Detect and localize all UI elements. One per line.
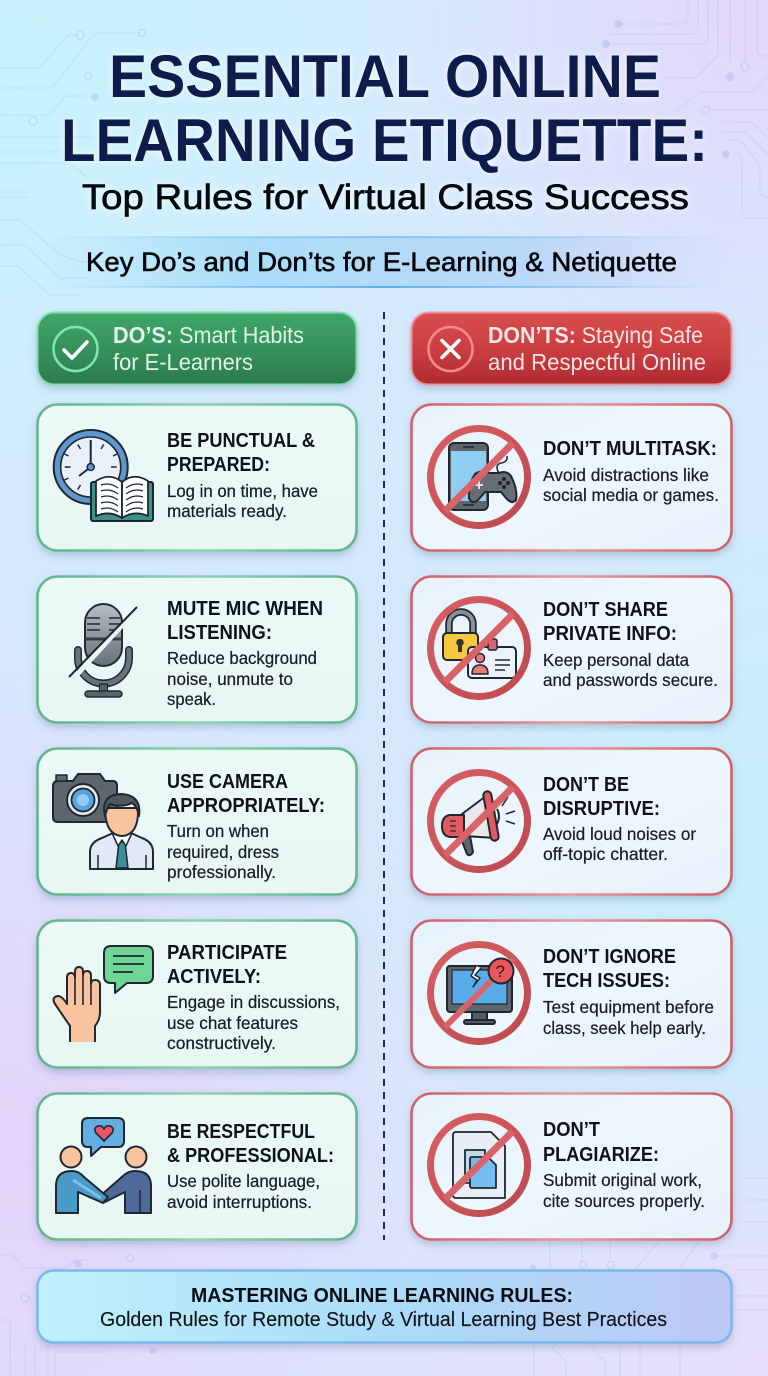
subtitle: Top Rules for Virtual Class Success <box>82 178 689 217</box>
text: MUTE MIC WHEN <box>167 598 323 620</box>
icon: check circle <box>54 327 98 371</box>
panel: don't plagiarize <box>412 1094 732 1240</box>
text: materials ready. <box>167 501 287 521</box>
text: Reduce background <box>167 648 317 668</box>
text: USE CAMERA <box>167 771 288 793</box>
text: required, dress <box>167 842 279 862</box>
icon: handshake with heart bubble <box>56 1118 151 1213</box>
text: professionally. <box>167 862 276 882</box>
text: Test equipment before <box>543 997 714 1017</box>
icon: no lock or id card <box>430 600 528 696</box>
text: DON’T BE <box>543 774 629 796</box>
text: PREPARED: <box>167 454 270 476</box>
panel: be punctual <box>38 404 356 550</box>
icon: no broken monitor: ? <box>496 962 505 981</box>
text: ACTIVELY: <box>167 966 261 988</box>
text <box>167 430 318 521</box>
text: Log in on time, have <box>167 481 318 501</box>
do's heading text <box>113 322 304 375</box>
text: Turn on when <box>167 821 269 841</box>
text <box>543 946 714 1038</box>
footer heading: MASTERING ONLINE LEARNING RULES: <box>191 1284 573 1307</box>
text: TECH ISSUES: <box>543 970 670 992</box>
title <box>61 43 708 174</box>
text: PARTICIPATE <box>167 942 287 964</box>
center dashed divider <box>383 312 385 1240</box>
text: use chat features <box>167 1013 298 1033</box>
footer banner <box>38 1270 732 1342</box>
icon: muted microphone <box>69 604 137 697</box>
panel: use camera <box>38 748 356 894</box>
text: DISRUPTIVE: <box>543 798 660 820</box>
don'ts heading text: DON’TS: Staying Safe <box>488 322 703 348</box>
text: and passwords secure. <box>543 670 718 690</box>
text <box>543 599 718 690</box>
icon: clock and book <box>54 430 153 521</box>
icon: x circle <box>428 327 472 371</box>
icon: no phone or games <box>430 428 528 526</box>
text: class, seek help early. <box>543 1018 706 1038</box>
panel: don'ts header <box>412 312 732 384</box>
text: DON’T MULTITASK: <box>543 438 717 460</box>
banner: key do's and don'ts <box>40 236 730 288</box>
text: & PROFESSIONAL: <box>167 1145 334 1167</box>
text: PLAGIARIZE: <box>543 1144 659 1166</box>
panel: don't multitask <box>412 404 732 550</box>
text <box>543 438 719 505</box>
text: avoid interruptions. <box>167 1192 312 1212</box>
text: speak. <box>167 689 216 709</box>
footer subheading: Golden Rules for Remote Study & Virtual Learning Best Practices <box>100 1309 667 1331</box>
text <box>167 1121 334 1212</box>
text: Engage in discussions, <box>167 992 340 1012</box>
do's heading text: DO’S: Smart Habits <box>113 322 304 348</box>
don'ts heading text: and Respectful Online <box>488 349 706 375</box>
text: BE PUNCTUAL & <box>167 430 315 452</box>
text: Avoid distractions like <box>543 465 709 485</box>
panel: don't share <box>412 576 732 722</box>
text: Submit original work, <box>543 1170 702 1190</box>
icon: camera and person <box>53 774 153 869</box>
text: off-topic chatter. <box>543 844 668 864</box>
panel: don't be disruptive <box>412 748 732 894</box>
banner: key do's and don'ts: Key Do’s and Don’ts for E-Learning & Netiquette <box>86 247 677 277</box>
text: APPROPRIATELY: <box>167 795 325 817</box>
panel: do's header <box>38 312 356 384</box>
text <box>543 1119 705 1211</box>
text: DON’T IGNORE <box>543 946 676 968</box>
text: Keep personal data <box>543 650 689 670</box>
text: LISTENING: <box>167 622 272 644</box>
text: cite sources properly. <box>543 1191 705 1211</box>
text: PRIVATE INFO: <box>543 623 677 645</box>
icon: no broken monitor <box>430 944 528 1042</box>
do's heading text: for E-Learners <box>113 349 253 375</box>
text: BE RESPECTFUL <box>167 1121 315 1143</box>
panel: be respectful <box>38 1094 356 1240</box>
icon: no copied document <box>430 1116 528 1214</box>
text: DON’T <box>543 1119 600 1141</box>
don'ts heading text <box>488 322 706 375</box>
text <box>167 771 325 882</box>
title: ESSENTIAL ONLINE <box>109 43 661 110</box>
title: LEARNING ETIQUETTE: <box>61 107 708 174</box>
text <box>543 774 696 864</box>
panel: mute mic <box>38 576 356 722</box>
icon: raised hand and chat bubble <box>54 946 153 1042</box>
panel: participate <box>38 920 356 1068</box>
text: social media or games. <box>543 485 719 505</box>
text: Use polite language, <box>167 1171 320 1191</box>
panel: don't ignore tech issues <box>412 920 732 1068</box>
text <box>167 598 323 709</box>
text: noise, unmute to <box>167 669 293 689</box>
icon: no megaphone <box>430 772 528 870</box>
text: DON’T SHARE <box>543 599 668 621</box>
text <box>167 942 340 1053</box>
text: constructively. <box>167 1033 276 1053</box>
text: Avoid loud noises or <box>543 824 696 844</box>
